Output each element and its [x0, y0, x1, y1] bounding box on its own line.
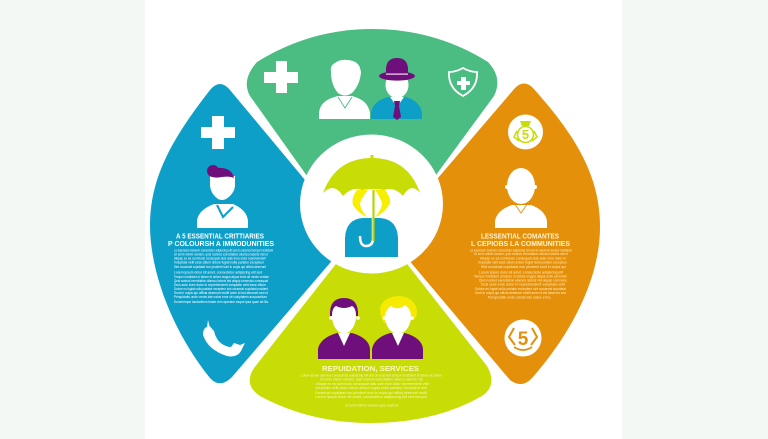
- panel: left blue segment: [150, 84, 342, 383]
- icon: yellow hair: [352, 190, 390, 217]
- text block: lime panel body: Lorem ipsum dolor sit amet, consectetur adipiscing elit sed tempor: [315, 394, 428, 399]
- icon: coin with number five, lime: 5: [522, 127, 529, 142]
- text block: orange panel body: Ut enim minim veniam, quis nostrud exercitation ullamco laboris nisi ut: [474, 251, 569, 256]
- text block: orange panel body: Lorem ipsum dolor sit amet, consectetur adipiscing elit: [479, 270, 564, 274]
- heading: blue panel: A 5 ESSENTIAL CRITTIARIES: [176, 232, 264, 240]
- text block: lime panel body: Ut enim minim veniam, quis nostrud exercitation ullamco laboris nisi: [320, 376, 423, 382]
- icon: umbrella: [323, 155, 420, 246]
- text block: lime panel body: [301, 372, 443, 408]
- text block: orange panel body: Perspiciatis unde omnis iste natus error...: [488, 294, 553, 300]
- text block: blue panel body: Lorem ipsum dolor sit amet, consectetur adipiscing elit sed: [174, 270, 262, 274]
- text block: blue panel body: Quis nostrud exercitation ullamco laboris nisi aliquip commodo consequat: [174, 278, 269, 283]
- text block: lime panel body: Aliquip ex ea commodo consequat duis aute irure dolor reprehenderit velit: [316, 381, 430, 386]
- text block: orange panel body: Sunt in culpa qui officia deserunt mollit anim id est laborum sed: [475, 290, 566, 295]
- icon: laurel badge with number five, orange: [504, 320, 542, 356]
- text block: blue panel body: Aliquip ex ea commodo consequat duis aute irure dolor reprehenderit: [174, 256, 267, 260]
- icon: person with purple hair: [318, 298, 370, 359]
- text block: lime panel body: Lorem ipsum dolorem consectetur adipiscing elit sed do eiusmod tempor incididunt ut labore et dolore: [301, 372, 443, 378]
- text block: orange panel body: Sint occaecat cupidatat non proident sunt in culpa qui: [481, 264, 566, 269]
- icon: green panel plus: [264, 61, 298, 93]
- icon: person in white: [495, 168, 547, 228]
- text block: lime panel body: Voluptate velit esse cillum dolore fugiat nulla pariatur excepteur sint: [315, 385, 428, 390]
- text block: orange panel body: Tempor incididunt ut labore et dolore magna aliqua enim ad minim: [474, 274, 568, 278]
- text block: blue panel body: Sint occaecat cupidatat non proident sunt in culpa qui officia deserunt: [174, 264, 267, 269]
- heading: orange panel: LESSENTIAL COMANTES: [481, 232, 559, 240]
- text block: orange panel body: Aliquip ex ea commodo consequat duis aute irure dolor in: [480, 256, 566, 260]
- text block: orange panel body: Quis nostrud exercitation ullamco laboris nisi aliquip commodo: [479, 278, 568, 282]
- icon: person with purple hat: [371, 58, 422, 120]
- text block: orange panel body: La ieaonsum dolorem consectetur adipiscing elit sed do eiusmod tempor incididunt: [470, 248, 573, 252]
- text block: blue panel body: Ut enim minim veniam, quis nostrud exercitation ullamco laboris nisi ut: [174, 252, 269, 256]
- heading: orange panel: [471, 232, 570, 248]
- text block: orange panel body: Voluptate velit esse cillum dolore fugiat nulla pariatur excepteur: [478, 260, 568, 264]
- heading: blue panel: P COLOURSH A IMMODUNITIES: [168, 239, 274, 248]
- icon: shield: [449, 68, 477, 96]
- text block: orange panel body: Dolore eu fugiat nulla pariatur excepteur sint occaecat cupidatat: [475, 286, 567, 291]
- heading: blue panel: [168, 232, 274, 248]
- text block: lime panel body: Occaecat cupidatat non proident sunt in culpa qui officia deserunt mollit: [315, 390, 428, 395]
- icon: laurel badge with number five, orange: 5: [518, 329, 529, 350]
- icon: coin with number five, lime: [508, 114, 543, 150]
- text block: blue panel body: Doloremque laudantium totam rem aperiam eaque ipsa quae ab illo.: [174, 299, 269, 304]
- text block: blue panel body: Tempor incididunt ut labore et dolore magna aliqua enim ad minim veniam: [174, 274, 269, 279]
- panel: right orange segment: [402, 84, 600, 384]
- heading: lime panel: REPUIDATION, SERVICES: [322, 364, 419, 373]
- icon: woman with purple hair: [197, 165, 248, 228]
- center circle with umbrella: [300, 134, 443, 274]
- panel: bottom lime segment: [250, 255, 491, 423]
- heading: orange panel: L CEPIOBS LA COMMUNITIES: [471, 239, 570, 248]
- text block: blue panel body: Dolore eu fugiat nulla pariatur excepteur sint occaecat cupidatat proident: [174, 286, 269, 291]
- panel: top green segment: [247, 29, 497, 190]
- icon: telephone handset: [203, 320, 245, 356]
- text block: blue panel body: Lo ieaonsum dolorem consectetur adipiscing elit sed do eiusmod tempor incididunt: [174, 248, 274, 252]
- icon: person in white: [319, 60, 370, 119]
- text block: blue panel body: [174, 248, 274, 304]
- text block: blue panel body: Perspiciatis unde omnis iste natus error sit voluptatem accusantium: [174, 294, 268, 299]
- icon: person with yellow hair: [372, 296, 423, 359]
- text block: blue panel body: Duis aute irure dolor in reprehenderit voluptate velit esse cillum: [174, 282, 267, 287]
- text block: lime panel body: Ut enim minim veniam quis nostrud: [345, 402, 398, 408]
- text block: orange panel body: [470, 248, 573, 300]
- icon: person body in blue: [345, 218, 398, 257]
- text block: blue panel body: Sunt in culpa qui officia deserunt mollit anim id est laborum sed ut: [174, 290, 269, 295]
- icon: blue panel plus: [201, 116, 235, 149]
- text block: blue panel body: Voluptate velit esse cillum dolore fugiat nulla pariatur excepteur: [174, 260, 265, 264]
- text block: orange panel body: Duis aute irure dolor in reprehenderit voluptate velit: [481, 282, 566, 286]
